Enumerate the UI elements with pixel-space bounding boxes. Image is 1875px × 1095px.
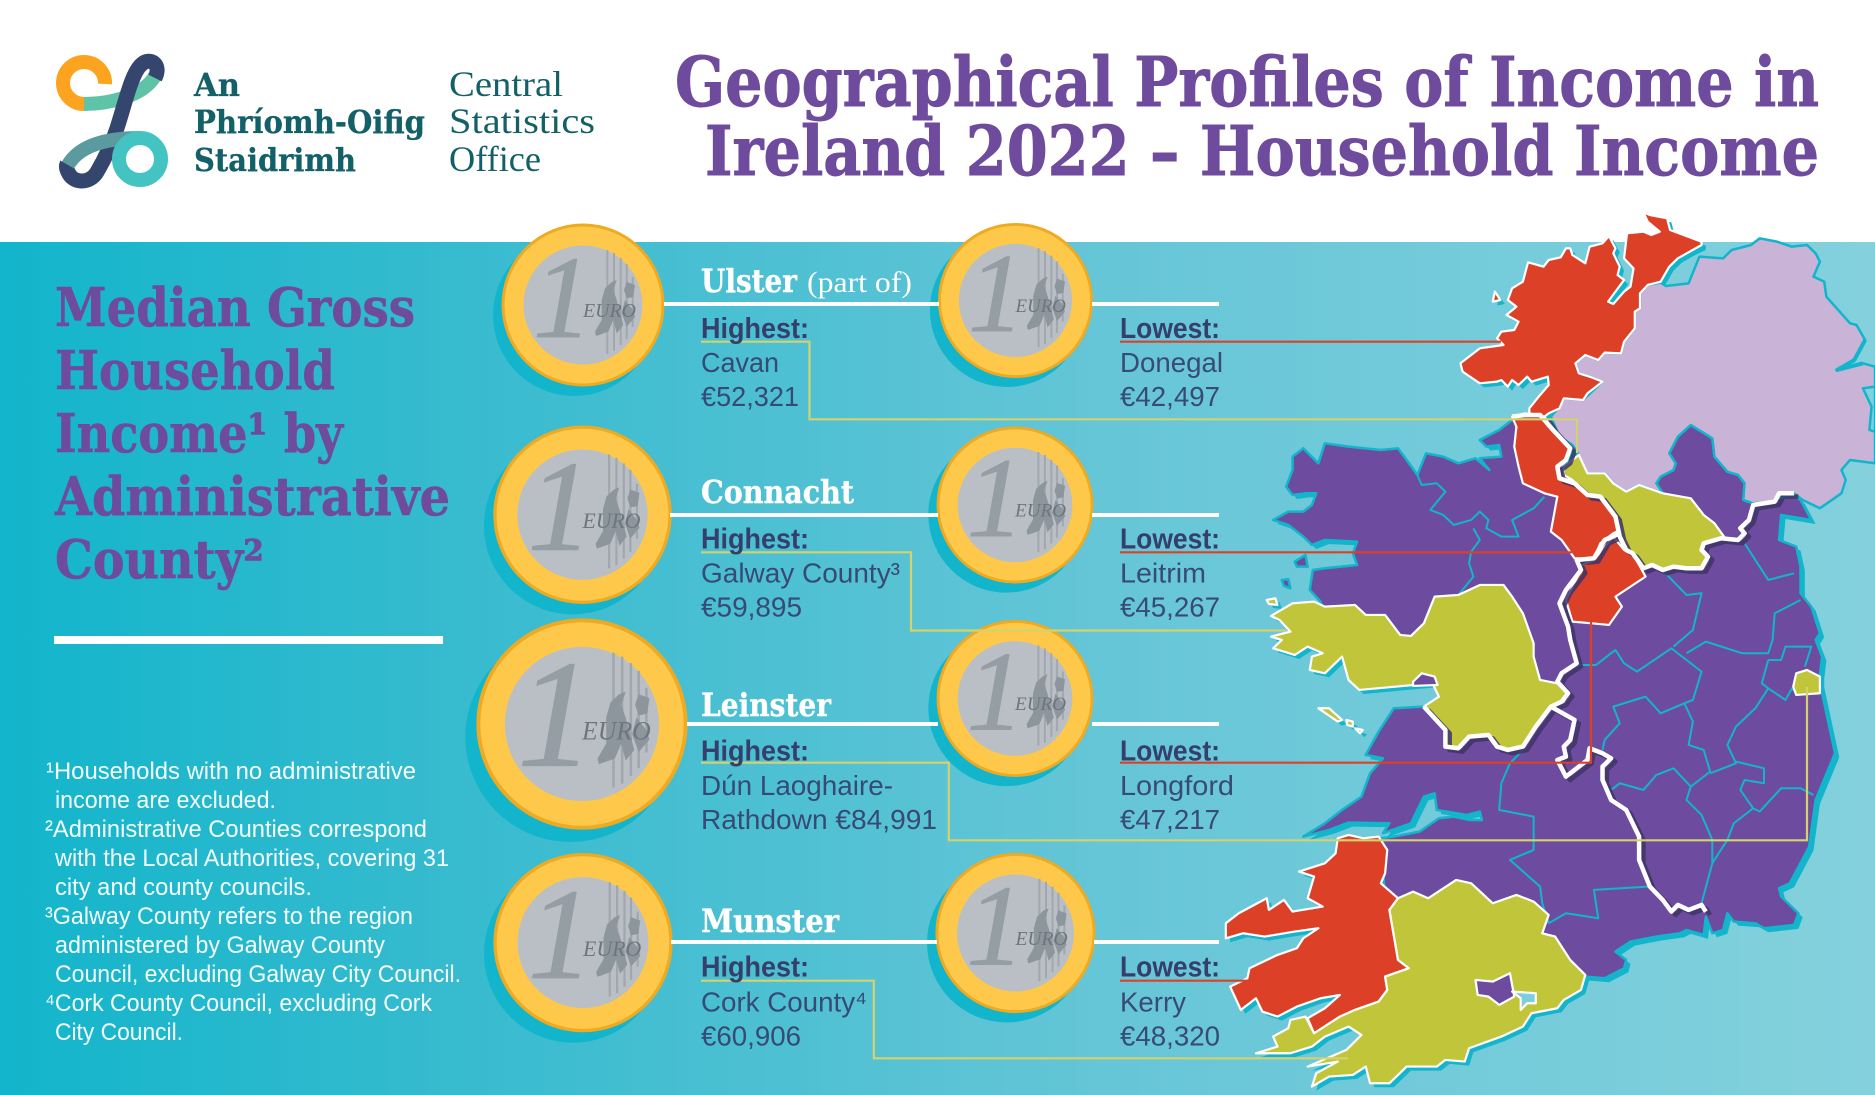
lowest: Kerry [1120,952,1220,1052]
highest: Cavan [701,313,809,412]
heading: median gross household income: Administrative [54,466,450,528]
highest: Dún Laoghaire-Rathdown [701,736,937,835]
lowest: Leitrim: €45,267 [1120,592,1220,623]
map: Dún Laoghaire-Rathdown (highest, Leinster) [1793,670,1820,695]
map of Ireland [1226,212,1875,1091]
footnotes: ³Galway County refers to the region [45,903,413,930]
highest: Dún Laoghaire-Rathdown: Highest: [701,736,809,768]
connector lines: lowest counties [1120,342,1591,981]
map: Strangford Lough and Belfast Lough [1837,340,1875,432]
map: Galway City [1413,673,1438,686]
heading: Ulster: Ulster [701,262,798,300]
map: Lough Foyle shading [1661,245,1706,282]
coin: Munster left: EURO [582,936,641,961]
coin: Leinster right [928,621,1092,786]
coin: Leinster left: EURO [581,717,651,746]
lowest: Donegal: Donegal [1120,347,1223,378]
footnotes: city and county councils. [55,874,312,901]
lowest: Longford: €47,217 [1120,804,1220,835]
highest: Cavan: €52,321 [701,381,799,412]
footnotes: Council, excluding Galway City Council. [55,961,461,988]
footnotes [45,758,461,1046]
icon: CSO knot mark [63,61,161,181]
logo: Central Statistics Office [63,61,595,181]
heading: Munster: Munster [701,902,840,940]
lowest: Donegal: €42,497 [1120,381,1220,412]
coin: Ulster left: 1 [533,232,592,363]
lowest: Longford: Longford [1120,770,1234,801]
map: Donegal (lowest, Ulster) [1460,212,1702,417]
coin: Leinster left [465,620,686,842]
coin: Connacht right: 1 [967,435,1024,561]
connector lines: highest counties [701,342,1807,1058]
coin: Munster right: 1 [966,862,1024,990]
lowest: Donegal: Lowest: [1120,313,1220,345]
highest: Galway County: Galway County³ [701,558,900,589]
lowest: Leitrim: Leitrim [1120,558,1206,589]
logo text: Irish name: Phríomh-Oifig [194,103,425,141]
map: Kerry (lowest, Munster) [1226,835,1409,1033]
logo text: Irish name [193,66,425,179]
heading: median gross household income: Median Gross [55,277,415,339]
map: Republic counties in purple [1273,417,1835,978]
heading: median gross household income: Income¹ by [55,403,345,465]
map: Cork County (highest, Munster) [1256,880,1585,1087]
footnotes: ¹Households with no administrative [46,758,416,785]
coin: Ulster right [930,224,1092,387]
highest: Galway County: €59,895 [701,592,802,623]
footnotes: ²Administrative Counties correspond [45,816,427,843]
highest: Dún Laoghaire-Rathdown: Dún Laoghaire- [701,770,893,801]
logo text: Irish name: Staidrimh [194,141,356,179]
map: Galway County (highest, Connacht) [1267,585,1568,750]
footnotes: income are excluded. [55,787,276,814]
map: small western islands [1282,555,1308,588]
footnotes: City Council. [55,1019,183,1046]
panel: Munster [701,902,1220,1052]
lowest: Donegal [1120,313,1223,412]
highest: Dún Laoghaire-Rathdown: Rathdown €84,991 [701,804,937,835]
highest: Cavan: Cavan [701,347,779,378]
map: Leitrim (lowest, Connacht) [1512,413,1620,558]
lowest: Leitrim [1120,524,1220,623]
page background band [0,242,1875,1095]
lowest: Kerry: Kerry [1120,987,1186,1018]
coin: Ulster left: EURO [582,300,636,322]
title [675,43,1819,192]
heading rule [54,636,443,644]
heading: median gross household income [54,277,450,591]
coin: Munster right [927,854,1094,1022]
coin: Connacht left [484,427,670,614]
heading: Leinster: Leinster [701,686,832,724]
highest: Galway County: Highest: [701,524,809,556]
map: province border shadows [1428,420,1798,915]
coin: Ulster right: 1 [968,232,1024,356]
highest: Cork County: Cork County⁴ [701,987,867,1018]
highest: Cork County: Highest: [701,952,809,984]
panel: Connacht [701,473,1220,623]
map: Cavan (highest, Ulster) [1564,455,1725,570]
map: province borders [1424,415,1794,912]
logo text: English name: Central [449,64,563,104]
heading: median gross household income: County² [55,529,264,591]
coin: Ulster right: EURO [1015,296,1066,317]
coin: Munster left: 1 [528,863,593,1007]
logo text: English name: Office [449,139,541,179]
map: Longford (lowest, Leinster) [1566,537,1646,625]
coin: Ulster left [493,225,663,396]
coin: Connacht right [928,428,1092,593]
coin: Leinster left: 1 [517,630,594,799]
highest: Cork County [701,952,867,1052]
map: coastal shadow [1230,216,1839,1091]
coin: Leinster right: EURO [1014,694,1066,715]
coin: Munster left [484,855,671,1043]
logo text: English name: Statistics [449,101,595,141]
panel: Leinster [701,686,1234,835]
lowest: Leitrim: Lowest: [1120,524,1220,556]
footnotes: administered by Galway County [55,932,385,959]
logo text: Irish name: An [193,66,240,104]
coin: Connacht left: EURO [582,508,641,533]
panel: Ulster [701,262,1223,412]
lowest: Longford [1120,736,1234,835]
coin: Connacht left: 1 [528,435,592,578]
lowest: Kerry: Lowest: [1120,952,1220,984]
lowest: Kerry: €48,320 [1120,1021,1220,1052]
heading: Ulster [701,262,912,300]
coin: Connacht right: EURO [1014,501,1066,522]
footnotes: ⁴Cork County Council, excluding Cork [45,990,433,1017]
map: Northern Ireland in lilac [1551,238,1875,508]
highest: Galway County [701,524,900,623]
footnotes: with the Local Authorities, covering 31 [54,845,449,872]
highest: Cork County: €60,906 [701,1021,801,1052]
logo text: English name [449,64,595,179]
highest: Cavan: Highest: [701,313,809,345]
map: Cork City [1476,973,1514,1005]
heading: Ulster: (part of) [807,266,912,299]
coin: Munster right: EURO [1015,928,1068,950]
map: Cork Harbour [1512,992,1536,1010]
heading: median gross household income: Household [55,340,335,402]
heading: Connacht: Connacht [701,473,854,511]
coin: Leinster right: 1 [967,628,1024,754]
map: county boundaries [1417,475,1813,923]
lowest: Longford: Lowest: [1120,736,1220,768]
rows: white divider rules [664,302,1219,944]
